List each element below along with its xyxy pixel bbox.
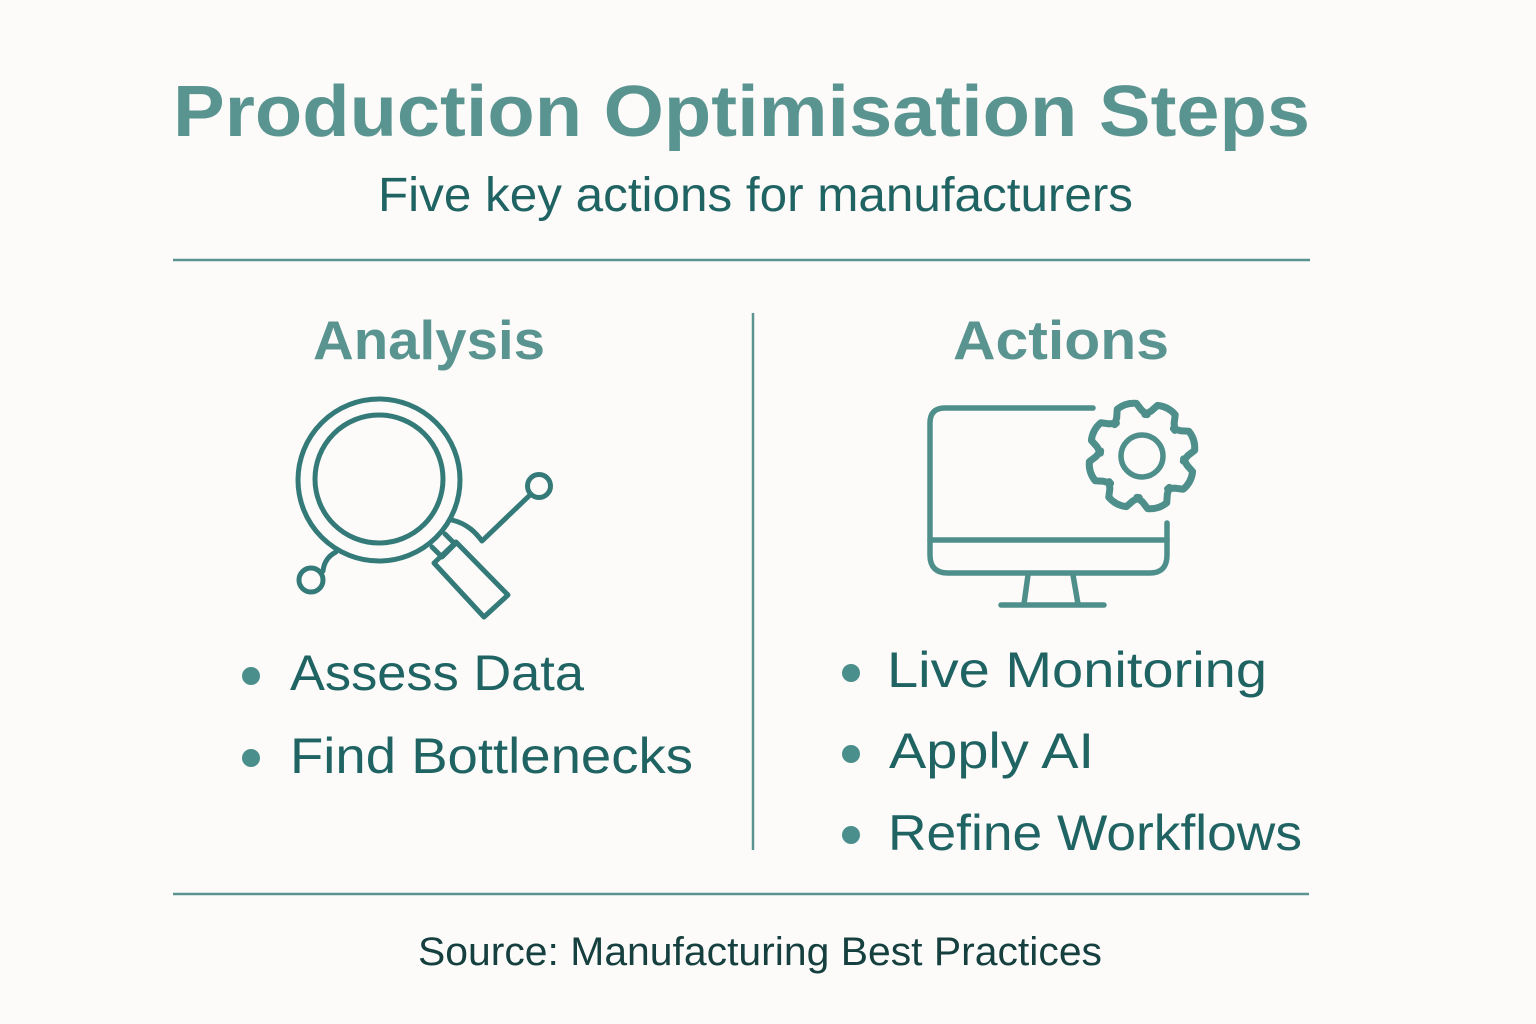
source note: Source: Manufacturing Best Practices [418, 930, 1102, 974]
icon: magnifying glass with data nodes [298, 399, 550, 617]
panel: actions [842, 309, 1302, 861]
list: actions items: Live Monitoring [887, 642, 1267, 698]
heading: actions: Actions [953, 309, 1169, 371]
list: actions items: Apply AI [889, 723, 1094, 779]
panel: analysis [242, 309, 693, 784]
list: analysis items [242, 645, 693, 784]
title: Production Optimisation Steps [173, 72, 1310, 152]
heading: analysis: Analysis [313, 309, 545, 371]
list: actions items: Refine Workflows [888, 805, 1302, 861]
subtitle: Five key actions for manufacturers [378, 169, 1133, 222]
list: analysis items: Find Bottlenecks [290, 728, 693, 784]
icon: monitor with gear [930, 399, 1199, 605]
list: actions items [842, 642, 1302, 861]
list: analysis items: Assess Data [290, 645, 584, 701]
